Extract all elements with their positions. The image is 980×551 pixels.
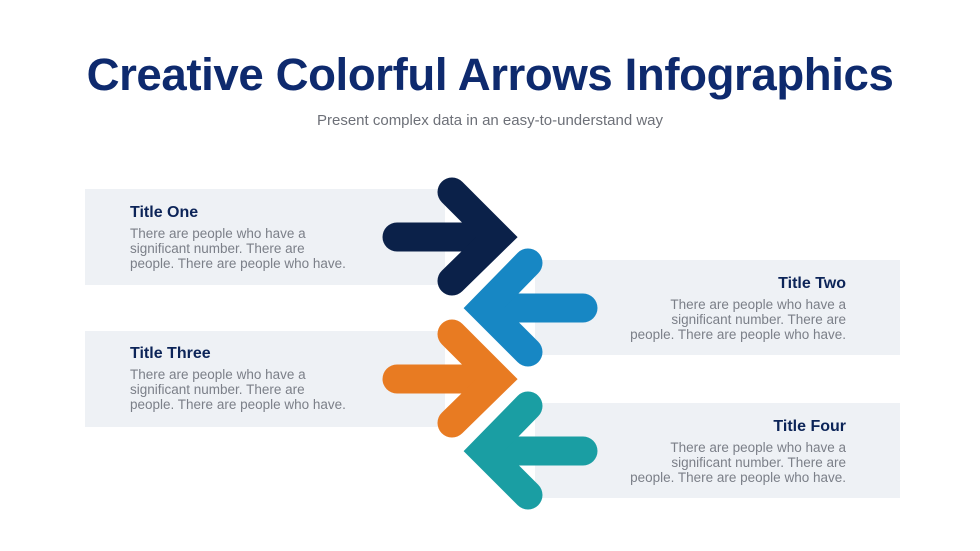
- text: title four: people. There are people who have.: [630, 470, 846, 485]
- text: title three: Title Three: [130, 345, 211, 362]
- text: title two: people. There are people who have.: [630, 327, 846, 342]
- panel: title one: [85, 189, 445, 285]
- text: title one: people. There are people who have.: [130, 256, 346, 271]
- text: title three: There are people who have a: [130, 367, 306, 382]
- text: title one: [130, 204, 346, 271]
- arrow: orange right: [397, 334, 497, 423]
- text: title four: significant number. There are: [671, 455, 846, 470]
- text: title two: Title Two: [778, 275, 846, 292]
- arrow: navy right: [397, 192, 497, 281]
- text: title one: significant number. There are: [130, 241, 305, 256]
- text: title one: There are people who have a: [130, 226, 306, 241]
- text: title four: There are people who have a: [670, 440, 846, 455]
- panel: title four: [535, 403, 900, 498]
- text: title four: [630, 418, 846, 485]
- text: title three: people. There are people who have.: [130, 397, 346, 412]
- text: title three: [130, 345, 346, 412]
- text: title one: Title One: [130, 204, 198, 221]
- panel: title three: [85, 331, 445, 427]
- arrow: teal left: [484, 406, 583, 495]
- text: title four: Title Four: [773, 418, 846, 435]
- text: title two: There are people who have a: [670, 297, 846, 312]
- text: title two: significant number. There are: [671, 312, 846, 327]
- subtitle: Present complex data in an easy-to-understand way: [317, 112, 663, 129]
- title: Creative Colorful Arrows Infographics: [87, 49, 893, 100]
- text: title three: significant number. There are: [130, 382, 305, 397]
- panel: title two: [535, 260, 900, 355]
- arrow: blue left: [484, 263, 583, 352]
- text: title two: [630, 275, 846, 342]
